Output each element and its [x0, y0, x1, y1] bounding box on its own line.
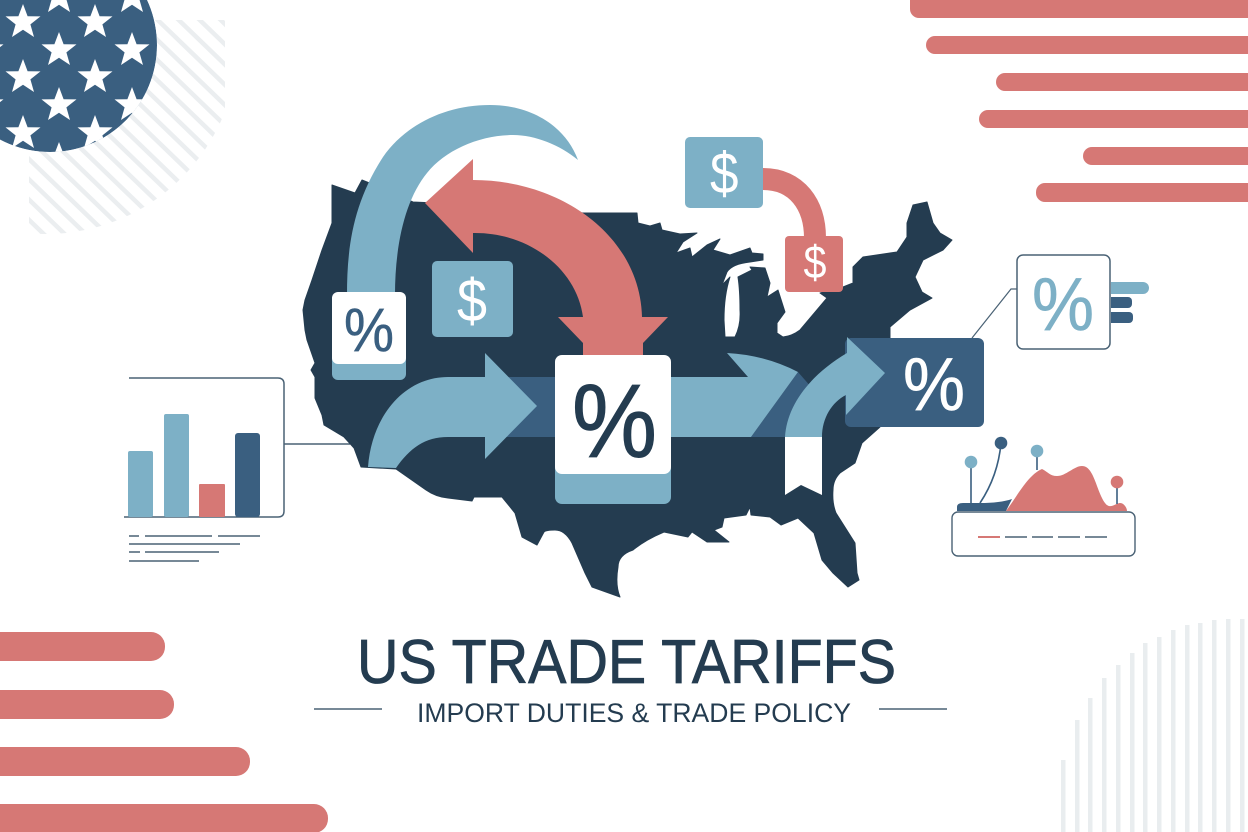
title: US TRADE TARIFFS [357, 628, 896, 697]
connector: red arc [763, 179, 815, 238]
bar chart callout [124, 378, 350, 561]
ribbon: white notch [785, 437, 822, 495]
bar: red [199, 484, 225, 517]
pin: red [1111, 476, 1123, 488]
card: red dollar [785, 236, 843, 292]
card: left percent: % [344, 296, 394, 364]
card: central percent [555, 355, 671, 504]
card: right dark blue percent: % [903, 342, 965, 426]
subtitle: IMPORT DUTIES & TRADE POLICY [417, 698, 851, 728]
pin stems [971, 443, 1117, 504]
arrow: red curved arrow [425, 159, 668, 360]
pin: dark blue [995, 437, 1007, 449]
connector: percent callout line [972, 289, 1017, 338]
decoration: top right stripes [910, 0, 1248, 202]
bar: dark blue [235, 433, 260, 517]
chart caption lines [129, 536, 260, 561]
card: top dollar: $ [710, 141, 738, 206]
card: left percent [332, 292, 406, 380]
decoration: bottom right vertical stripes [1061, 619, 1244, 832]
pin: light blue left [965, 456, 977, 468]
card: central percent: % [572, 364, 657, 480]
legend dashes [1005, 536, 1107, 538]
decoration: bottom left stripes [0, 632, 328, 832]
area chart callout [952, 437, 1135, 556]
arrow: left curved blue arrow [368, 353, 537, 468]
bar: light blue short [128, 451, 153, 517]
card: red dollar: $ [804, 236, 826, 288]
tabs beside percent card [1111, 282, 1149, 323]
card: top dollar [685, 137, 763, 208]
bar: light blue tall [164, 414, 189, 517]
decoration: star circle [0, 0, 157, 152]
legend box [952, 512, 1135, 556]
red area [1006, 466, 1127, 511]
central band [485, 353, 812, 437]
pin: light blue right [1031, 445, 1043, 457]
card: left dollar: $ [457, 267, 487, 334]
card: outlined percent [1017, 255, 1110, 349]
US map silhouette [303, 180, 952, 597]
decoration: diagonal hatch [29, 20, 225, 234]
card: outlined percent: % [1032, 262, 1094, 346]
arrow: right curved arrow [785, 337, 885, 437]
arrow: blue arc from left card [347, 105, 578, 295]
subtitle rules [314, 708, 947, 710]
card: left dollar [432, 261, 513, 337]
card: right dark blue percent [845, 338, 984, 427]
